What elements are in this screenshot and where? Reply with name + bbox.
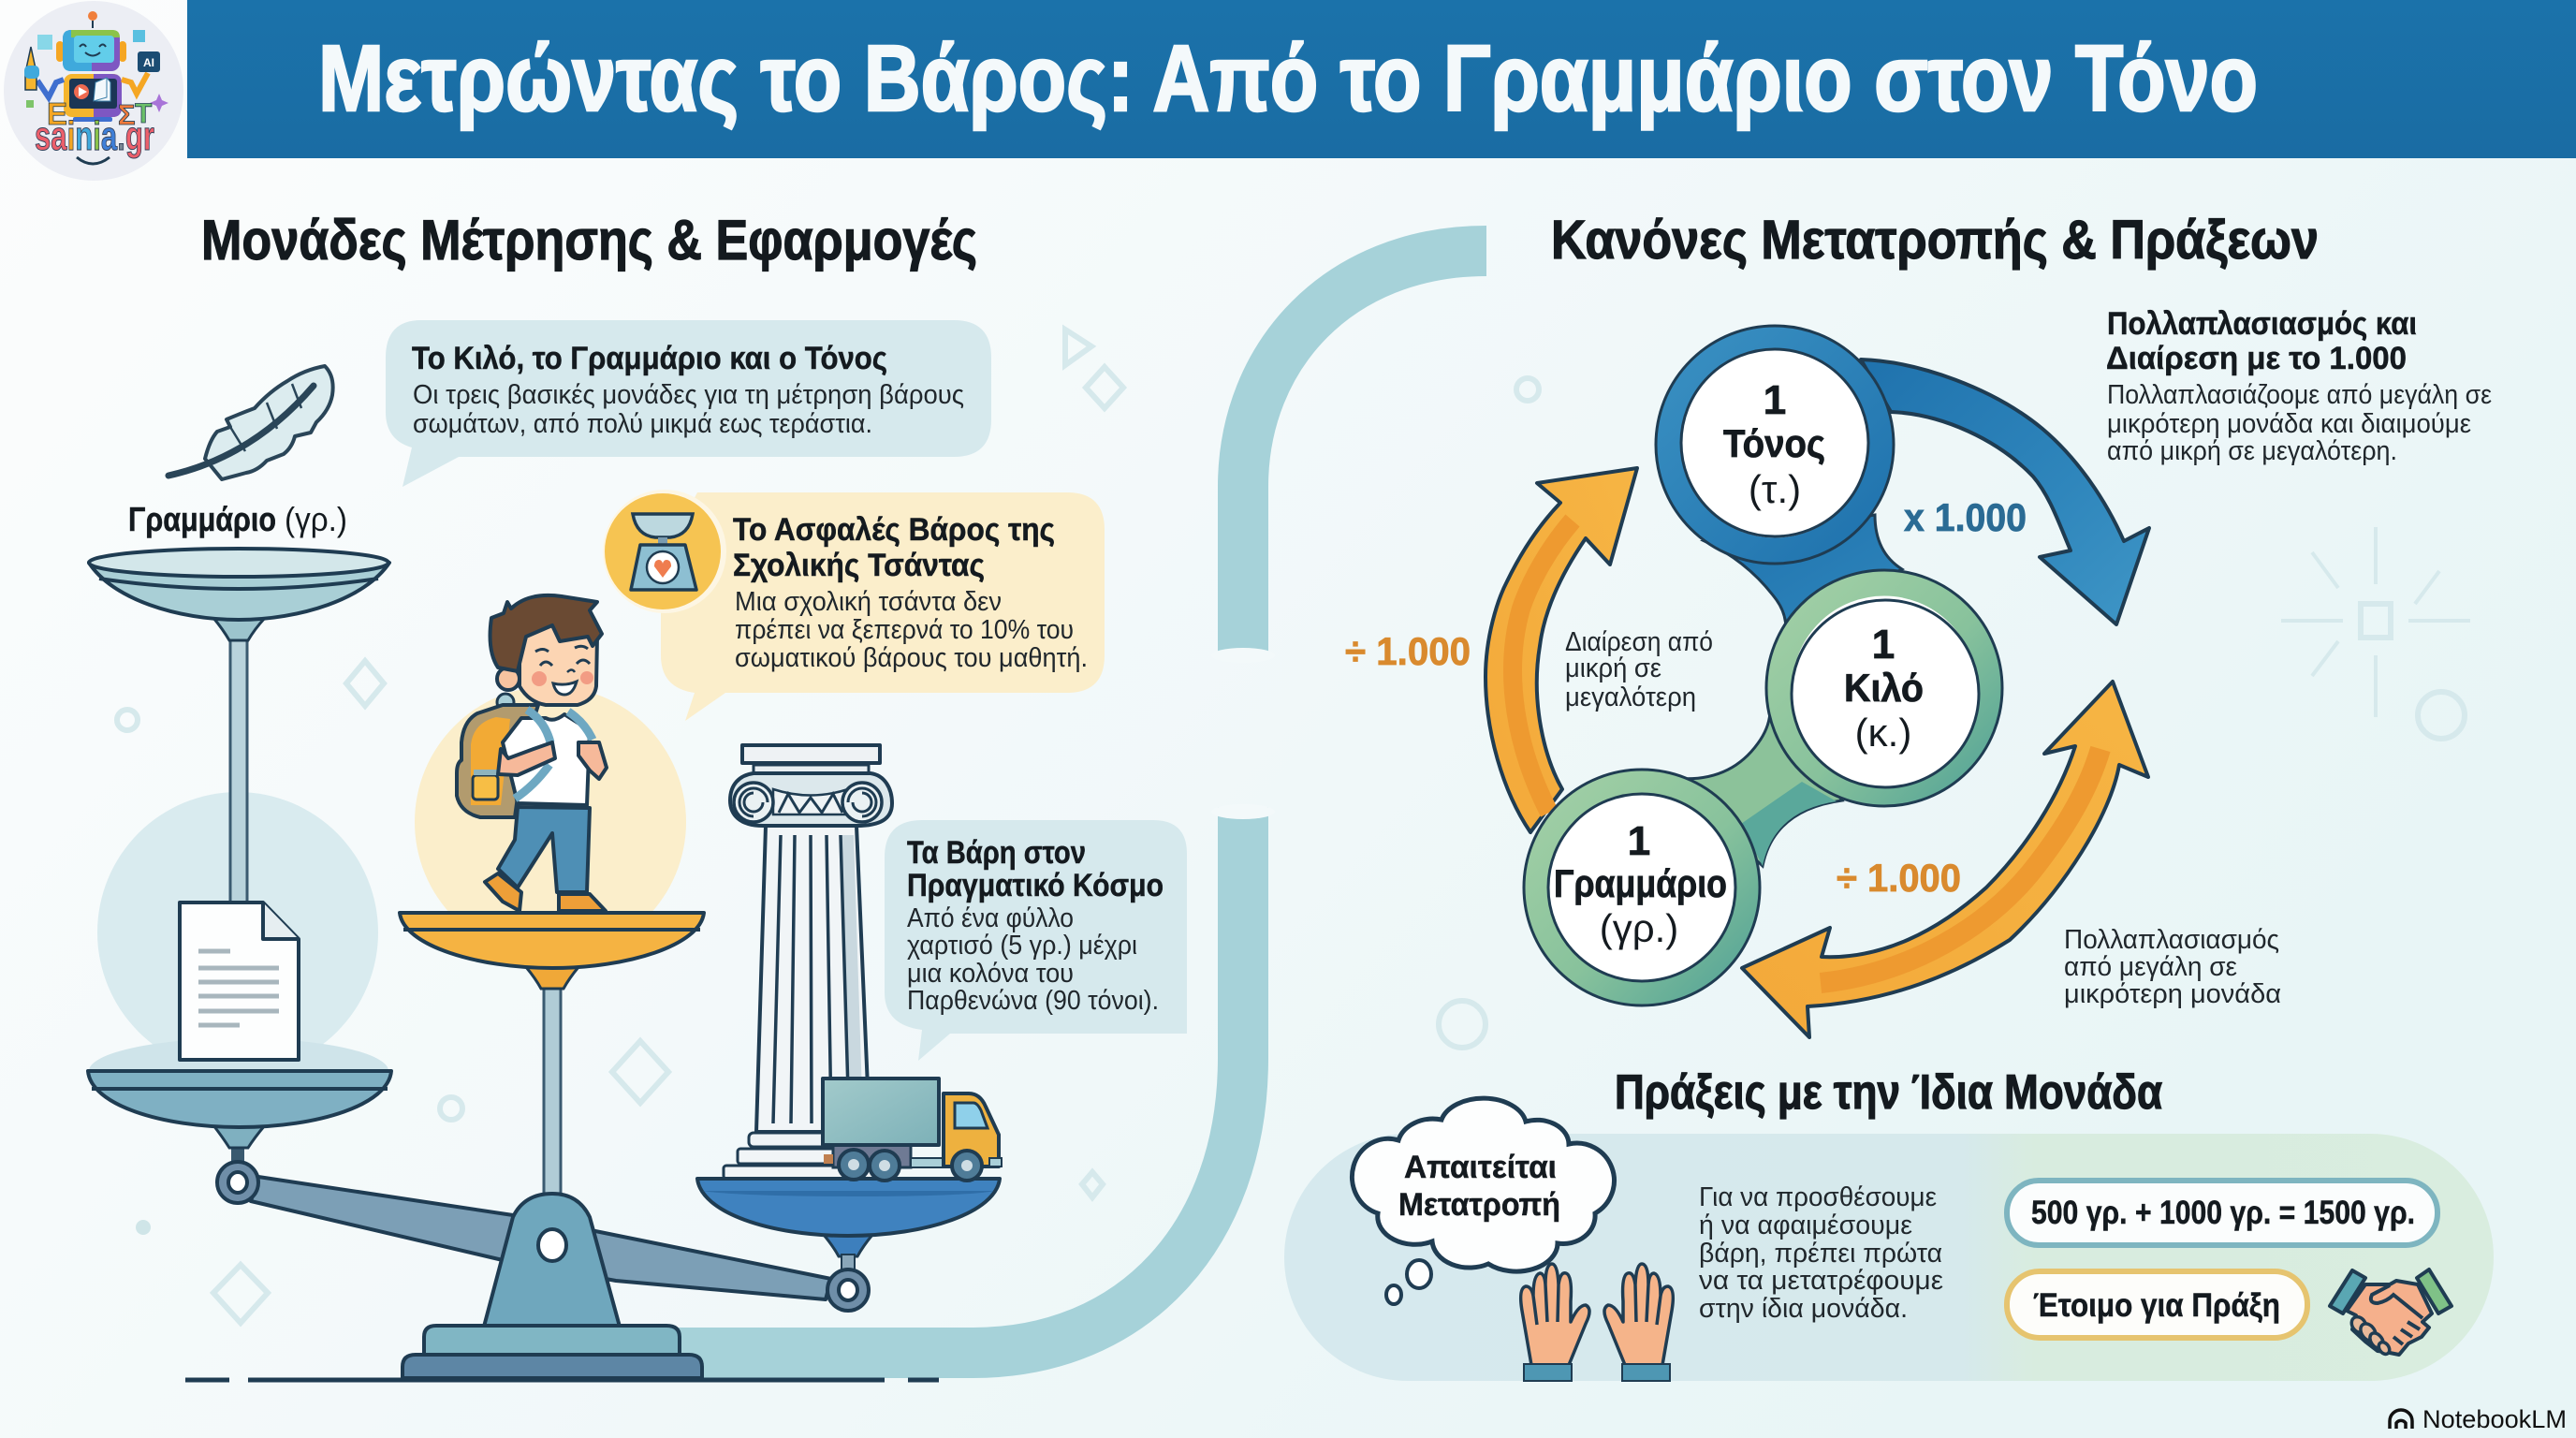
balance: middle yellow pan with stem <box>400 913 704 1196</box>
callout: safe schoolbag weight <box>661 492 1105 721</box>
icon: sheet of paper <box>180 902 299 1060</box>
logo: sainia.gr robot <box>4 1 183 181</box>
connector: ton to kilo neck <box>1705 515 1902 629</box>
logo: sainia.gr robot: AI <box>143 56 154 69</box>
unit circle: ton: (τ.) <box>1749 467 1801 511</box>
callout: safe schoolbag weight: Το Ασφαλές Βάρος της <box>733 512 1055 548</box>
label: x 1000: x 1.000 <box>1904 495 2027 539</box>
text block: division direction <box>1565 627 1713 712</box>
text block: multiplication and division by 1000: Διαίρεση με το 1.000 <box>2106 341 2407 376</box>
pill: ready for operation <box>2007 1271 2307 1338</box>
logo: sainia.gr robot: Ε <box>47 96 67 131</box>
text block: division direction: μεγαλότερη <box>1565 682 1696 712</box>
text block: multiplication direction: από μεγάλη σε <box>2064 952 2237 982</box>
text block: multiplication and division by 1000: από μικρή σε μεγαλότερη. <box>2107 436 2397 466</box>
balance: right blue pan <box>697 1179 1000 1256</box>
heading: units and applications: Μονάδες Μέτρησης & Εφαρμογές <box>201 209 977 271</box>
text block: multiplication direction <box>2064 925 2281 1009</box>
panel: same-unit operations bar <box>1284 1134 2494 1381</box>
illustration: student with backpack <box>457 595 607 911</box>
balance: lower left pan <box>88 1038 391 1166</box>
callout: safe schoolbag weight: Σχολικής Τσάντας <box>733 548 985 583</box>
unit circle: ton <box>1656 326 1894 564</box>
callout: weights in the real world: Παρθενώνα (90 τόνοι). <box>907 986 1159 1016</box>
text block: division direction: μικρή σε <box>1565 653 1661 683</box>
callout: weights in the real world <box>885 820 1187 1061</box>
unit circle: gram <box>1524 770 1760 1005</box>
connector ribbon: upper part <box>1211 251 1486 663</box>
heading: conversion rules: Κανόνες Μετατροπής & Πράξεων <box>1551 210 2319 271</box>
connector ribbon: lower part <box>674 804 1275 1353</box>
callout: safe schoolbag weight: σωματικού βάρους του μαθητή. <box>735 643 1088 673</box>
logo: sainia.gr robot: Τ <box>135 98 152 129</box>
arrow: orange bottom right <box>1742 682 2148 1037</box>
text block: multiplication and division by 1000: Πολλαπλασιάζοομε από μεγάλη σε <box>2107 380 2492 410</box>
pill: addition example: 500 γρ. + 1000 γρ. = 1500 γρ. <box>2031 1195 2415 1231</box>
callout: safe schoolbag weight: πρέπει να ξεπερνά το 10% του <box>735 615 1074 645</box>
text block: multiplication and division by 1000: μικρότερη μονάδα και διαιμούμε <box>2107 409 2471 439</box>
pill: ready for operation: Έτοιμο για Πράξη <box>2033 1287 2280 1324</box>
logo: sainia.gr robot: Σ <box>118 98 136 131</box>
callout: weights in the real world: Τα Βάρη στον <box>907 835 1086 871</box>
connector: kilo to gram neck <box>1666 707 1842 866</box>
brand: NotebookLM: NotebookLM <box>2422 1405 2567 1433</box>
callout: kilo, gram and ton: σωμάτων, από πολύ μικμά εως τεράστια. <box>413 409 872 439</box>
callout: weights in the real world: χαρτισό (5 γρ.) μέχρι <box>907 931 1137 961</box>
unit circle: kilo: (κ.) <box>1855 711 1911 755</box>
callout: kilo, gram and ton <box>386 320 991 487</box>
decorative background shapes <box>117 330 2470 1323</box>
thought cloud: conversion required: Μετατροπή <box>1398 1187 1560 1223</box>
icon: handshake <box>2330 1269 2452 1357</box>
text block: multiplication and division by 1000 <box>2106 306 2492 466</box>
unit circle: kilo: 1 <box>1872 622 1895 668</box>
unit circle: kilo <box>1766 570 2002 806</box>
arrow: orange left divide <box>1486 468 1637 832</box>
text block: multiplication direction: μικρότερη μονάδα <box>2064 979 2281 1009</box>
logo: sainia.gr robot: sainia.gr <box>35 113 154 159</box>
text block: multiplication direction: Πολλαπλασιασμός <box>2064 925 2279 955</box>
thought cloud: conversion required <box>1352 1098 1614 1304</box>
icon: feather <box>168 366 333 479</box>
text block: convert to same unit: βάρη, πρέπει πρώτα <box>1699 1239 1942 1269</box>
balance: beam, fulcrum and base <box>185 1162 939 1380</box>
text block: convert to same unit: να τα μετατρέφουμε <box>1699 1266 1943 1296</box>
balance: gram pan with stem <box>89 549 389 908</box>
unit circle: gram: Γραμμάριο <box>1554 861 1727 905</box>
pale circle behind paper <box>97 792 378 1073</box>
text block: multiplication and division by 1000: Πολλαπλασιασμός και <box>2107 306 2417 342</box>
text block: convert to same unit: ή να αφαιμέσουμε <box>1699 1211 1912 1240</box>
unit circle: ton: 1 <box>1764 377 1786 423</box>
icon: raised hands <box>1521 1264 1673 1381</box>
callout: safe schoolbag weight: Μια σχολική τσάντα δεν <box>735 587 1002 617</box>
yellow circle behind student <box>415 686 686 958</box>
unit circle: gram: (γρ.) <box>1600 906 1678 950</box>
header bar <box>187 0 2576 158</box>
unit circle: ton: Τόνος <box>1723 421 1825 465</box>
heading: same-unit operations: Πράξεις με την Ίδια Μονάδα <box>1615 1065 2162 1120</box>
callout: weights in the real world: Από ένα φύλλο <box>907 903 1074 933</box>
callout: weights in the real world: Πραγματικό Κόσμο <box>907 868 1164 903</box>
label: divide 1000 bottom: ÷ 1.000 <box>1837 856 1961 900</box>
text block: division direction: Διαίρεση από <box>1565 627 1713 657</box>
callout: kilo, gram and ton: Το Κιλό, το Γραμμάριο και ο Τόνος <box>412 341 887 376</box>
main title: Μετρώντας το Βάρος: Από το Γραμμάριο στον Τόνο <box>318 26 2258 131</box>
icon: kitchen scale <box>603 490 726 613</box>
callout: kilo, gram and ton: Οι τρεις βασικές μονάδες για τη μέτρηση βάρους <box>413 380 964 410</box>
callout: weights in the real world: μια κολόνα του <box>907 959 1074 989</box>
thought cloud: conversion required: Απαιτείται <box>1404 1150 1557 1185</box>
text block: convert to same unit <box>1699 1182 1943 1324</box>
label: gram: (γρ.) <box>285 500 347 538</box>
unit circle: kilo: Κιλό <box>1844 666 1924 710</box>
arrow: blue multiply <box>1861 360 2149 624</box>
label: divide 1000 left: ÷ 1.000 <box>1345 629 1471 673</box>
text block: convert to same unit: στην ίδια μονάδα. <box>1699 1294 1908 1324</box>
unit circle: gram: 1 <box>1628 818 1650 864</box>
pill: addition example <box>2007 1181 2437 1245</box>
illustration: truck <box>823 1078 1002 1181</box>
illustration: ionic column <box>724 745 892 1179</box>
text block: convert to same unit: Για να προσθέσουμε <box>1699 1182 1937 1212</box>
label: gram: Γραμμάριο <box>128 500 276 538</box>
